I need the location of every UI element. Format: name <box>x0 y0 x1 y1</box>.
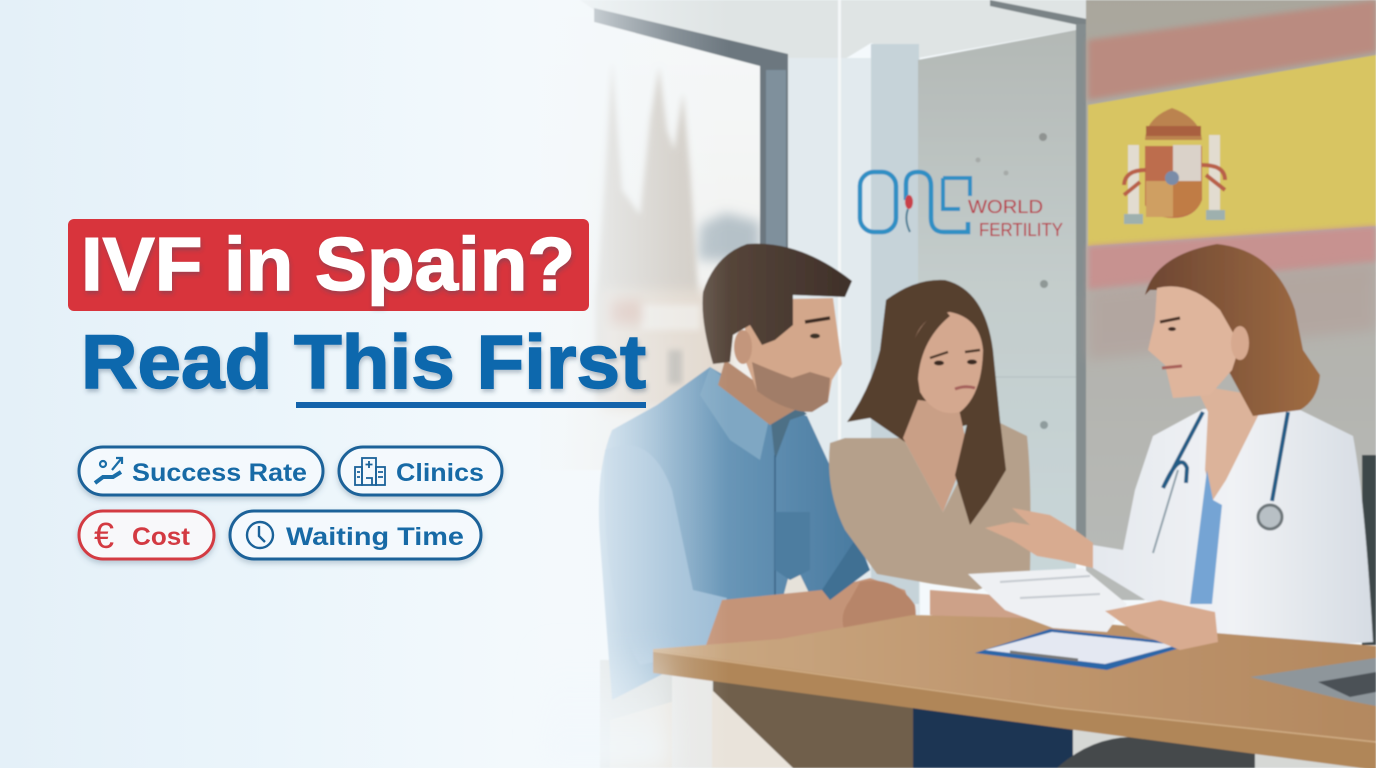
neck and chest <box>903 400 968 512</box>
concrete wall <box>918 30 1076 575</box>
beard <box>752 362 830 412</box>
icon: hospital building <box>355 458 385 485</box>
coat <box>1093 405 1373 651</box>
subtitle: Read This First: Read This First <box>81 320 646 405</box>
clipboard and papers <box>968 568 1218 670</box>
logo: One World Fertility: FERTILITY <box>979 220 1063 240</box>
woman <box>829 280 1073 768</box>
icon: clock <box>247 522 273 548</box>
stethoscope <box>1163 412 1203 488</box>
shirt sleeve <box>604 445 727 665</box>
pill: Cost <box>79 511 214 559</box>
man <box>599 244 957 768</box>
glass divider post <box>990 0 1092 28</box>
scrub <box>1190 470 1222 604</box>
right concrete wall <box>1086 0 1376 600</box>
neck <box>718 360 795 425</box>
Spanish flag on wall <box>1088 0 1376 360</box>
logo: One World Fertility <box>860 172 1063 240</box>
outstretched hand <box>985 508 1093 568</box>
window with city view <box>540 0 765 470</box>
laptop <box>1250 658 1376 706</box>
hair <box>702 244 852 364</box>
gap between arm and torso <box>782 560 813 601</box>
pill: Cost: Cost <box>132 523 191 551</box>
forearm and clasped hands <box>705 578 917 648</box>
side wall <box>788 58 920 618</box>
pill: Waiting Time: Waiting Time <box>286 523 464 551</box>
doctor chair <box>1362 455 1376 645</box>
doctor hand on papers <box>1105 600 1218 650</box>
logo: One World Fertility: WORLD <box>968 197 1043 217</box>
dark trousers <box>1057 737 1255 768</box>
shirt <box>599 367 870 700</box>
face <box>913 312 983 413</box>
window frame <box>594 8 788 460</box>
forearm and hand <box>930 590 1030 628</box>
title badge: IVF in Spain?: IVF in Spain? <box>81 222 575 306</box>
lower room: floor and chairs <box>600 660 1376 768</box>
pill: Clinics: Clinics <box>396 459 484 487</box>
hair back <box>847 280 993 442</box>
jeans <box>913 700 1073 768</box>
icon: euro sign: € <box>94 515 114 556</box>
collar <box>700 367 770 460</box>
face <box>745 298 842 412</box>
doctor <box>985 244 1373 768</box>
ceiling <box>580 0 1090 62</box>
trousers <box>713 680 957 768</box>
pill: Success Rate: Success Rate <box>132 459 307 487</box>
photo scene: clinic room <box>540 0 1376 768</box>
coat of arms <box>1124 108 1225 224</box>
bottom-left fade overlay <box>540 640 670 768</box>
pill: Success Rate <box>79 447 323 495</box>
pill: Waiting Time <box>230 511 481 559</box>
pill: Clinics <box>339 447 502 495</box>
table <box>653 615 1376 768</box>
hair <box>1145 244 1320 416</box>
neck and chest <box>1195 385 1260 500</box>
sweater <box>829 418 1031 590</box>
ear <box>734 330 752 364</box>
hair lock right <box>955 340 1006 525</box>
face <box>1148 286 1240 398</box>
icon: hand with growth arrow <box>95 458 122 483</box>
